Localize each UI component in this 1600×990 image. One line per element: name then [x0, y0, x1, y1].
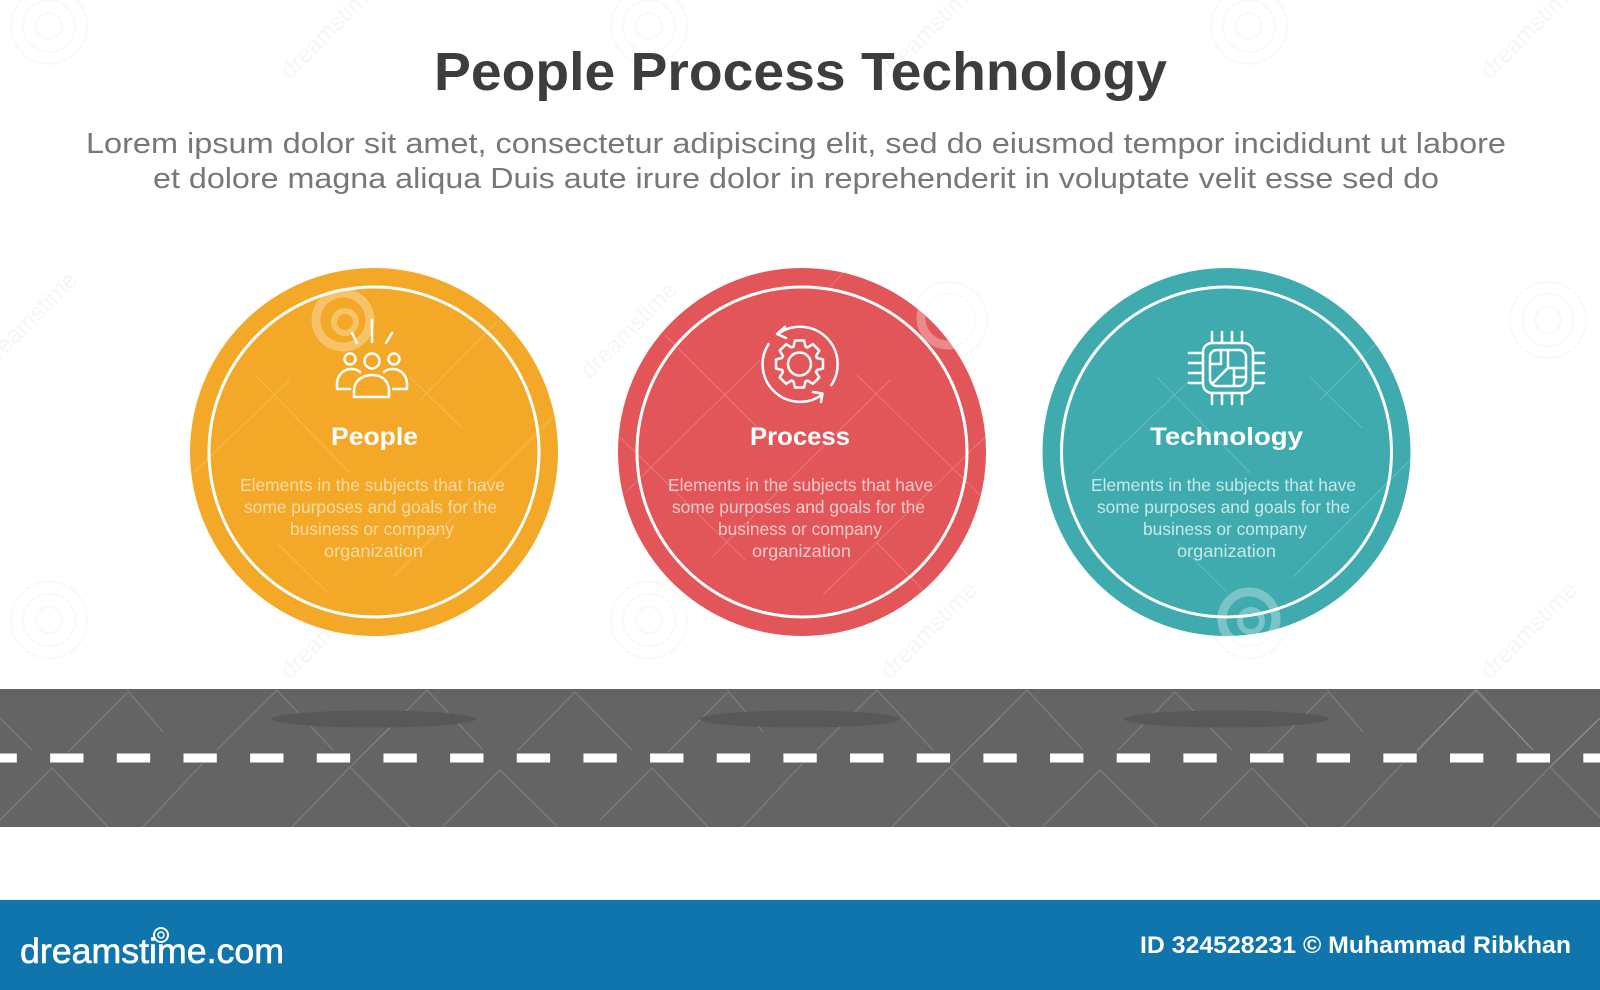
text: process description [668, 475, 933, 561]
circle: people background [190, 268, 558, 636]
text: people description: business or company [290, 519, 454, 539]
icon: technology chip [1189, 332, 1264, 404]
heading: people: People [331, 423, 418, 451]
text: dreamstime [575, 276, 683, 384]
text: dreamstime [875, 576, 983, 684]
text: process description: business or company [718, 519, 882, 539]
text: technology description: business or company [1143, 519, 1307, 539]
text: process description: some purposes and goals for the [672, 497, 925, 517]
circle: technology background [1042, 268, 1410, 636]
logo: dreamstime.com: dreamstime.com [20, 932, 284, 971]
subtitle text [86, 128, 1506, 195]
heading: technology: Technology [1150, 423, 1303, 451]
circle: process background [618, 268, 986, 636]
text: process description: Elements in the subjects that have [668, 475, 933, 495]
text: people description: organization [324, 541, 423, 561]
text: technology description: Elements in the subjects that have [1091, 475, 1356, 495]
text: dreamstime [1475, 576, 1583, 684]
credit text: ID 324528231 © Muhammad Ribkhan [1140, 932, 1571, 959]
text: process description: organization [752, 541, 851, 561]
footer bar [0, 900, 1600, 990]
panel: technology [1042, 268, 1453, 646]
text: dreamstime [1175, 276, 1283, 384]
heading: process: Process [750, 423, 850, 451]
panel: process [618, 268, 986, 636]
road shadows [272, 710, 1328, 728]
text: technology description: organization [1177, 541, 1276, 561]
text: dreamstime [275, 576, 383, 684]
text: technology description: some purposes and goals for the [1097, 497, 1350, 517]
text: technology description [1091, 475, 1356, 561]
subtitle text: Lorem ipsum dolor sit amet, consectetur adipiscing elit, sed do eiusmod tempor incididunt ut labore [86, 128, 1506, 160]
text: people description: Elements in the subjects that have [240, 475, 505, 495]
text: people description [240, 475, 505, 561]
panel: people [190, 268, 558, 636]
icon: process gear [763, 327, 838, 402]
title: People Process Technology [434, 42, 1167, 102]
subtitle text: et dolore magna aliqua Duis aute irure dolor in reprehenderit in voluptate velit esse sed do [153, 163, 1439, 195]
road [0, 689, 1600, 827]
road centre dashes [0, 754, 1600, 762]
icon: people [337, 320, 407, 397]
text: people description: some purposes and goals for the [244, 497, 497, 517]
